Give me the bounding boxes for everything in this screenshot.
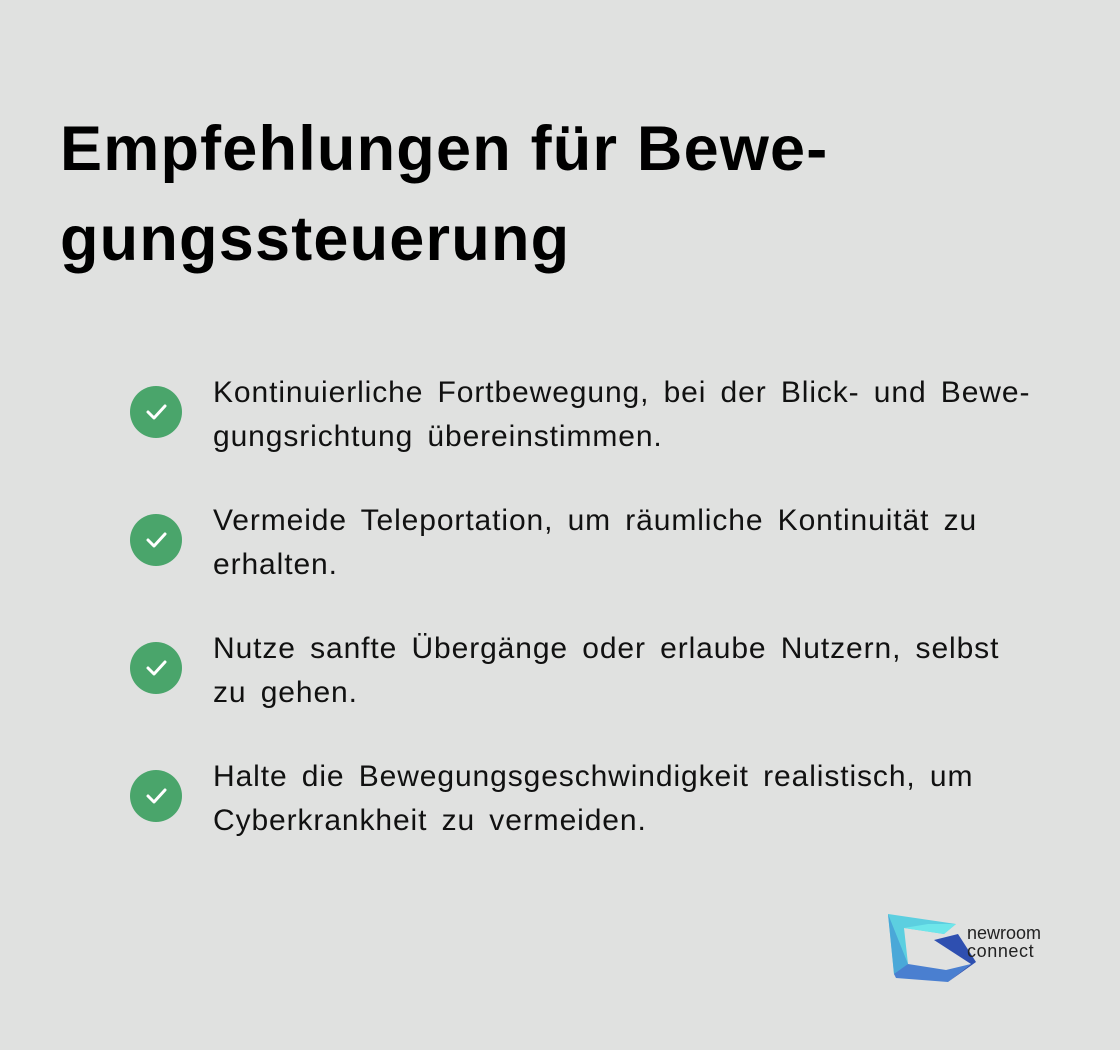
- text: Vermeide Teleportation, um räumliche Kontinuität zu: [213, 504, 977, 537]
- item 4: [130, 760, 973, 837]
- text: [213, 760, 973, 837]
- text: Kontinuierliche Fortbewegung, bei der Blick- und Bewe-: [213, 376, 1030, 409]
- logo: connect: [967, 941, 1034, 961]
- text: gungsrichtung übereinstimmen.: [213, 420, 663, 453]
- icon: check: [130, 770, 182, 822]
- text: [213, 504, 977, 581]
- text: Nutze sanfte Übergänge oder erlaube Nutzern, selbst: [213, 632, 999, 665]
- item 3: [130, 632, 999, 709]
- text: erhalten.: [213, 548, 338, 581]
- icon: check: [130, 386, 182, 438]
- text: Cyberkrankheit zu vermeiden.: [213, 804, 647, 837]
- title: gungssteuerung: [60, 204, 570, 274]
- item 2: [130, 504, 977, 581]
- text: [213, 632, 999, 709]
- title: Empfehlungen für Bewe-: [60, 114, 828, 184]
- title: [60, 114, 828, 274]
- logo: newroom: [967, 923, 1041, 943]
- logo: [888, 914, 1041, 982]
- icon: check: [130, 514, 182, 566]
- text: Halte die Bewegungsgeschwindigkeit realistisch, um: [213, 760, 973, 793]
- icon: check: [130, 642, 182, 694]
- text: [213, 376, 1030, 453]
- item 1: [130, 376, 1030, 453]
- text: zu gehen.: [213, 676, 358, 709]
